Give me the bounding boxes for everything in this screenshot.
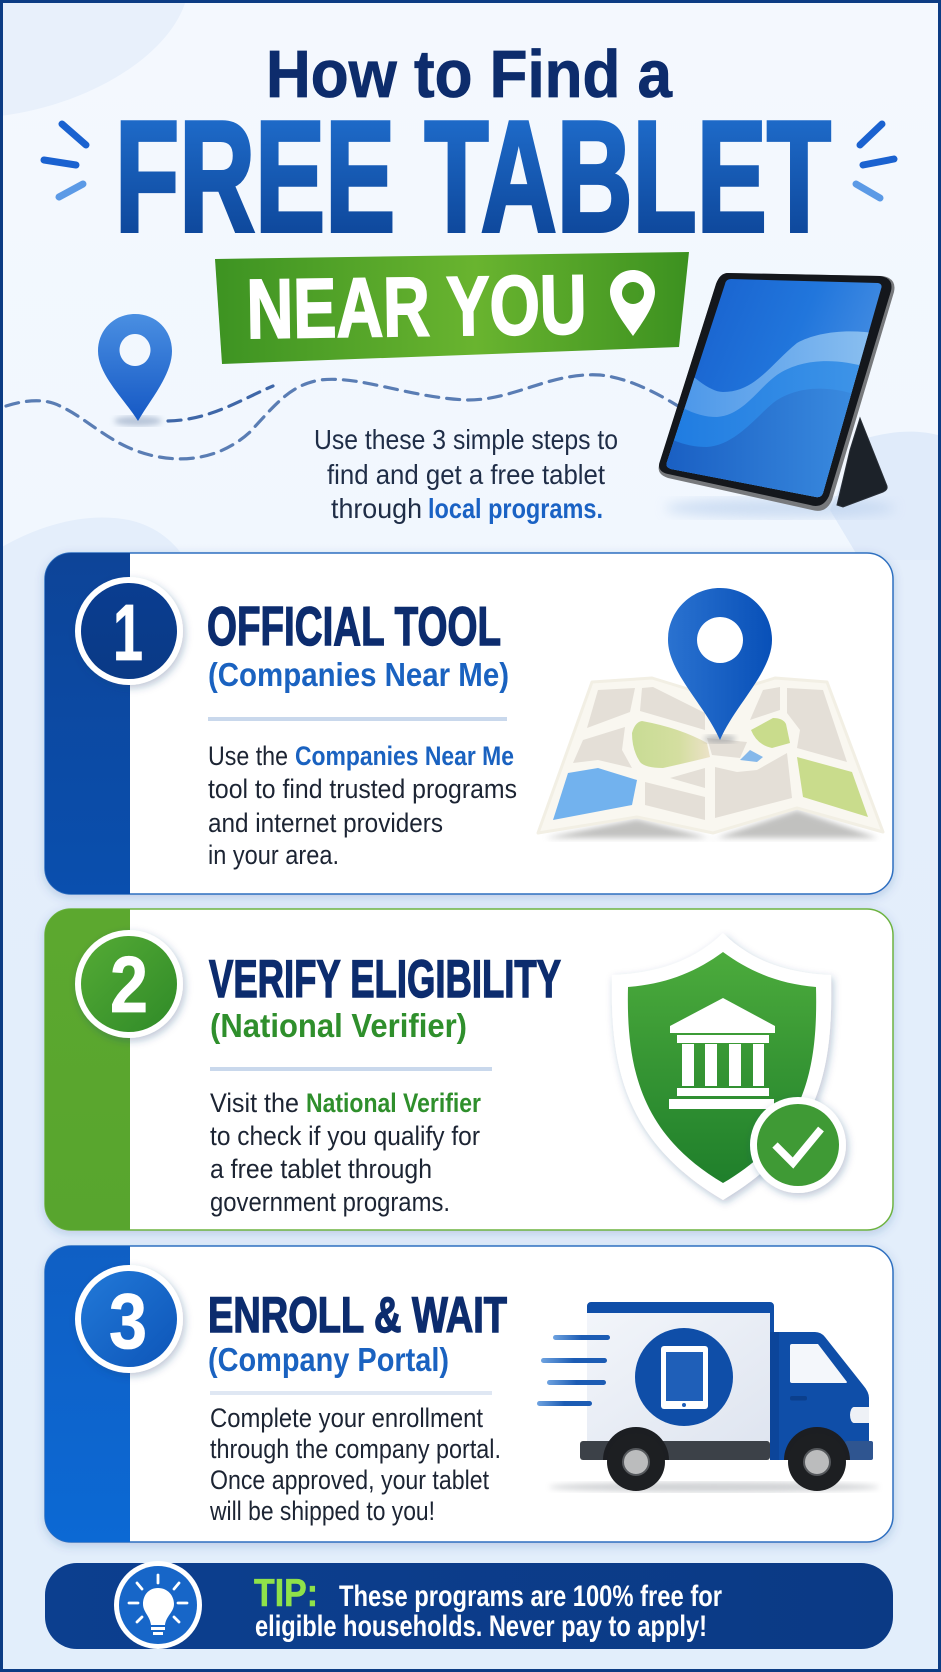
- title line: How to Find a: How to Find a: [266, 37, 673, 112]
- step 1 body text: in your area.: [208, 840, 339, 870]
- step 3 subheading: (Company Portal): [208, 1341, 449, 1378]
- step 3 body text: [209, 1403, 501, 1526]
- dashed route: [6, 375, 678, 459]
- banner text: NEAR YOU: [246, 257, 587, 356]
- intro text: find and get a free tablet: [327, 459, 605, 490]
- step 2 body text: government programs.: [210, 1187, 450, 1217]
- step 2 body text: to check if you qualify for: [210, 1121, 480, 1151]
- check badge: [750, 1097, 846, 1193]
- intro text: Use these 3 simple steps to: [314, 424, 618, 455]
- step 2 body text: Visit the: [210, 1088, 299, 1118]
- step 2 heading: VERIFY ELIGIBILITY: [209, 950, 561, 1009]
- cab: [770, 1332, 869, 1460]
- step 1 body text: [208, 741, 517, 870]
- speed lines: [537, 1335, 610, 1406]
- tablet stand: [837, 418, 887, 507]
- intro text: through: [331, 493, 422, 524]
- icon: delivery truck: [537, 1302, 879, 1492]
- step 3 body text: Once approved, your tablet: [210, 1465, 489, 1495]
- icon: blue location pin: [98, 314, 172, 426]
- step 1 subheading: (Companies Near Me): [208, 656, 509, 693]
- step 3 body text: Complete your enrollment: [210, 1403, 483, 1433]
- icon: left emphasis rays: [44, 124, 86, 197]
- icon: shield with government building: [612, 933, 846, 1200]
- icon: right emphasis rays: [856, 124, 894, 198]
- tip text: eligible households. Never pay to apply!: [255, 1610, 707, 1643]
- step 2 subheading: (National Verifier): [210, 1007, 467, 1044]
- panel: step 2 verify eligibility: [45, 909, 893, 1230]
- icon: folded map with pin: [538, 588, 883, 839]
- step 3 body text: will be shipped to you!: [209, 1496, 435, 1526]
- step number 2: [75, 930, 183, 1038]
- callout: tip bar: [45, 1561, 893, 1649]
- tip text: [254, 1572, 722, 1643]
- title: [115, 37, 831, 265]
- panel: step 3 enroll and wait: [45, 1246, 893, 1542]
- step number 1: 1: [113, 588, 143, 677]
- step 3 body text: through the company portal.: [210, 1434, 501, 1464]
- step number 3: [75, 1265, 183, 1373]
- step 1 body text: Companies Near Me: [295, 741, 514, 771]
- step 2 body text: a free tablet through: [210, 1154, 432, 1184]
- icon: tablet: [658, 273, 894, 520]
- step 3 heading: ENROLL & WAIT: [208, 1287, 507, 1343]
- tablet emblem: [635, 1328, 733, 1426]
- step number 3: 3: [109, 1277, 147, 1365]
- step 1 body text: and internet providers: [208, 808, 443, 838]
- wheels: [603, 1427, 850, 1491]
- tip text: TIP:: [254, 1572, 318, 1615]
- panel: step 1 official tool: [45, 553, 893, 894]
- step 1 body text: Use the: [208, 741, 288, 771]
- tablet screen: [666, 279, 882, 498]
- building: [669, 998, 775, 1109]
- step 1 heading: OFFICIAL TOOL: [207, 595, 501, 657]
- icon: banner pin: [610, 270, 655, 336]
- tip text: These programs are 100% free for: [339, 1580, 722, 1613]
- step number 1: [75, 577, 183, 685]
- step 2 body text: National Verifier: [306, 1088, 481, 1118]
- intro text: local programs.: [428, 493, 603, 524]
- cargo box: [587, 1313, 770, 1441]
- step 2 body text: [210, 1088, 481, 1217]
- intro text: [314, 424, 618, 524]
- step 1 body text: tool to find trusted programs: [208, 774, 517, 804]
- banner: NEAR YOU: [215, 252, 689, 364]
- icon: light bulb: [114, 1561, 202, 1649]
- map pin: [668, 588, 772, 740]
- chassis: [580, 1441, 770, 1460]
- step number 2: 2: [110, 940, 148, 1029]
